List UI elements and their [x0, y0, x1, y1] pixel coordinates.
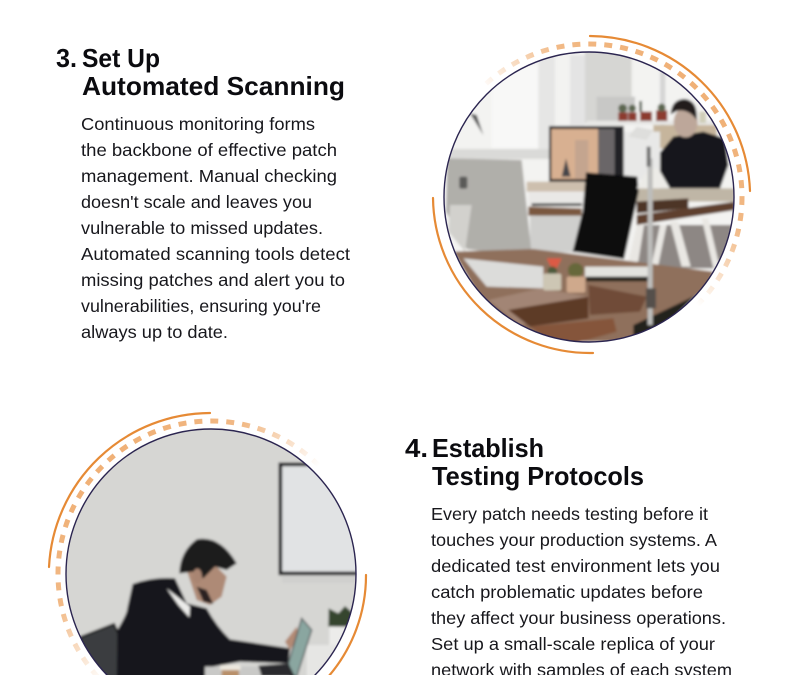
text block: step 4 body: catch problematic updates before [431, 582, 703, 602]
photo: office with desks and computers [444, 52, 734, 342]
text block: step 3 body: Continuous monitoring forms [81, 114, 315, 134]
text block: step 3 body: missing patches and alert you to [81, 270, 345, 290]
text block: step 4 body: dedicated test environment lets you [431, 556, 720, 576]
text block: step 4 body: touches your production systems. A [431, 530, 717, 550]
orange arcs [433, 36, 750, 353]
back desks [527, 182, 735, 268]
dashed ring [58, 421, 364, 675]
text block: step 3 body [81, 114, 350, 342]
panel: step 3 [56, 36, 750, 355]
laptop [258, 618, 312, 675]
text block: step 3 body: management. Manual checking [81, 166, 337, 186]
heading: step 4: 4. [405, 433, 428, 463]
text block: step 3 body: vulnerabilities, ensuring you're [81, 296, 321, 316]
seated man [659, 99, 728, 188]
heading: step 3: Set Up [82, 43, 160, 73]
desk surface [205, 667, 262, 675]
heading: step 4 [405, 433, 644, 491]
heading: step 3: 3. [56, 43, 77, 73]
man in black hoodie [117, 539, 298, 675]
desk lamp pole [628, 127, 656, 325]
text block: step 3 body: vulnerable to missed updates. [81, 218, 323, 238]
dashed ring [436, 44, 742, 350]
heading: step 4: Testing Protocols [432, 461, 644, 491]
laptop on desk [585, 267, 650, 281]
office chair [80, 624, 120, 675]
foreground desk [453, 249, 713, 345]
cactus pots [543, 258, 585, 293]
plants on shelf [618, 101, 667, 121]
heading: step 4: Establish [432, 433, 544, 463]
background monitor [549, 126, 624, 183]
black office chair [573, 172, 639, 259]
text block: step 3 body: doesn't scale and leaves you [81, 192, 312, 212]
text block: step 4 body: they affect your business operations. [431, 608, 726, 628]
heading: step 3 [56, 43, 345, 101]
text block: step 3 body: the backbone of effective patch [81, 140, 337, 160]
photo outline ring [66, 429, 356, 675]
orange arcs [49, 413, 366, 675]
text block: step 3 body: Automated scanning tools detect [81, 244, 350, 264]
heading: step 3: Automated Scanning [82, 71, 345, 101]
text block: step 3 body: always up to date. [81, 322, 228, 342]
panel: step 4 [49, 413, 732, 675]
text block: step 4 body [431, 504, 732, 675]
text block: step 4 body: Every patch needs testing before it [431, 504, 708, 524]
text block: step 4 body: Set up a small-scale replica of your [431, 634, 715, 654]
foreground computer back [446, 158, 532, 257]
photo: man working on a laptop [66, 430, 356, 675]
coffee cup [220, 665, 241, 675]
photo outline ring [444, 52, 734, 342]
potted plant [328, 606, 353, 650]
